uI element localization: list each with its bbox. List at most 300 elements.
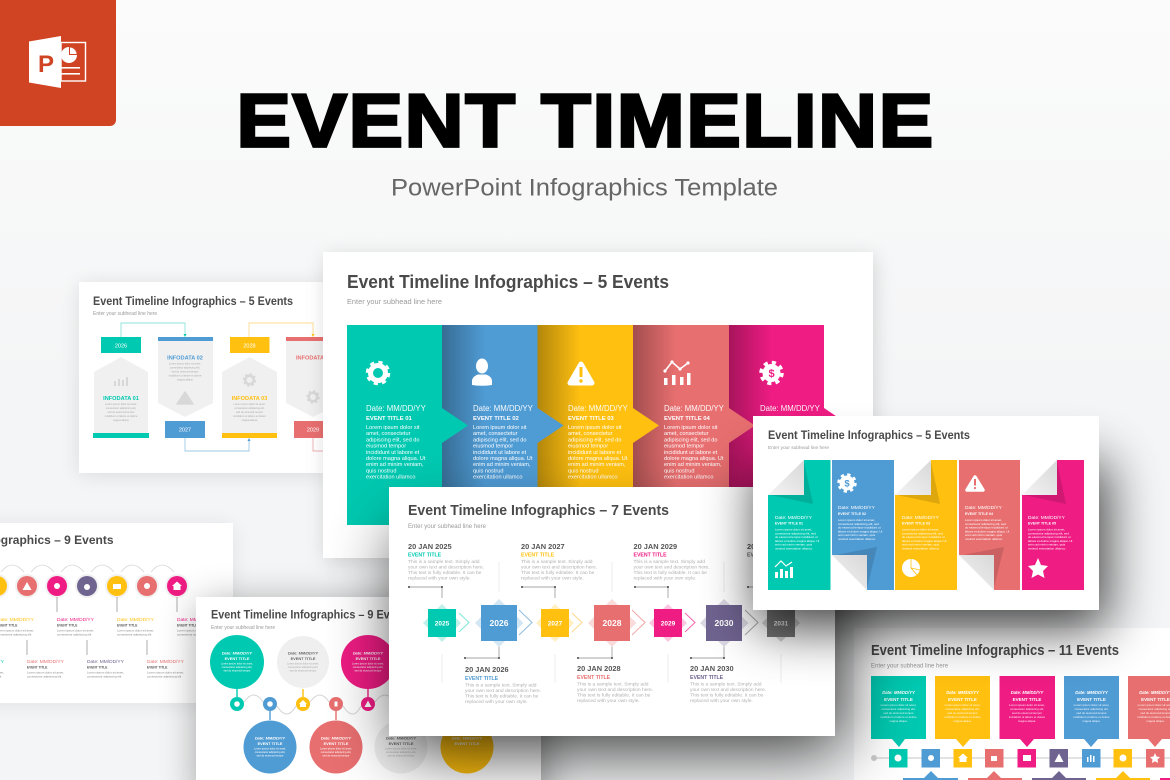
circle labels: EVENT TITLE — [291, 656, 316, 661]
circle body text: Lorem ipsum dolor sit amet, — [221, 662, 253, 666]
heading: Event Timeline Infographics – 5 Events — [347, 271, 669, 292]
event labels top row: EVENT TITLE — [57, 624, 77, 628]
hexagon card 04: 2029 — [307, 428, 319, 434]
circle labels: Date: MM/DD/YY — [452, 736, 483, 740]
year squares: 2031 — [774, 620, 789, 628]
folded column 5: nostrud exercitation ullamco — [1028, 546, 1066, 550]
column text 04: dolore magna aliqua. Ut — [664, 456, 724, 462]
event labels bottom row: consectetur adipiscing elit — [147, 674, 182, 678]
folded column 3: Date: MM/DD/YY — [902, 515, 940, 521]
circle labels: EVENT TITLE — [324, 741, 349, 746]
folded column 4: enim ad minim veniam, quis — [965, 533, 1003, 537]
event labels bottom row: Date: MM/DD/YY — [27, 659, 65, 665]
subhead: Enter your subhead line here — [347, 297, 442, 306]
icon: gear — [368, 362, 388, 384]
event note 2027: 20 JAN 2027 — [521, 542, 565, 551]
folded column 4: do eiusmod tempor incididunt ut — [965, 526, 1008, 530]
hexagon card 02: magna aliqua. — [177, 378, 193, 382]
callout cards top: incididunt ut labore et dolore — [1009, 715, 1046, 719]
column text 01: quis nostrud — [366, 468, 396, 474]
hexagon card 03 — [222, 337, 277, 438]
callout cards top: sed do eiusmod tempor — [883, 711, 914, 715]
folded column 2: nostrud exercitation ullamco — [838, 537, 876, 541]
folded column 1: Lorem ipsum dolor sit amet, — [775, 528, 812, 532]
hexagon card 03: sed do eiusmod tempor — [236, 410, 263, 414]
panel: slide nine events circles: Enter your subhead line here — [211, 625, 275, 631]
event labels top row: EVENT TITLE — [117, 624, 137, 628]
circle body text: sed do eiusmod tempor — [223, 668, 251, 672]
hexagon card 02 — [158, 337, 213, 438]
year squares — [428, 605, 795, 641]
callout cards top: magna aliqua. — [889, 719, 908, 723]
column text 01: adipiscing elit, sed do — [366, 437, 420, 443]
folded column 2: $ — [844, 478, 850, 490]
folded column 5: Lorem ipsum dolor sit amet, — [1028, 528, 1065, 532]
event labels bottom row — [0, 659, 185, 678]
hexagon card 02: Lorem ipsum dolor sit amet, — [169, 362, 201, 366]
event labels top row: Lorem ipsum dolor sit amet, — [57, 628, 94, 632]
callout cards top: Lorem ipsum dolor sit amet, — [881, 703, 917, 707]
folded column 4: Date: MM/DD/YY — [965, 505, 1003, 511]
small nodes — [230, 697, 375, 711]
callout cards top: magna aliqua. — [953, 719, 972, 723]
column text 02: incididunt ut labore et — [473, 450, 527, 456]
icon: person — [472, 358, 492, 386]
circle body text: sed do eiusmod tempor — [322, 754, 350, 758]
callout cards top: EVENT TITLE — [1077, 697, 1106, 702]
event labels top row: EVENT TITLE — [177, 624, 197, 628]
folded column 1: Date: MM/DD/YY — [775, 515, 813, 521]
circle labels: EVENT TITLE — [225, 656, 250, 661]
subhead: Enter your subhead line here — [408, 523, 486, 530]
column text 04: enim ad minim veniam, — [664, 462, 722, 468]
connecting curves — [244, 695, 395, 714]
folded column 1: do eiusmod tempor incididunt ut — [775, 535, 818, 539]
hexagon card 01: magna aliqua. — [113, 418, 129, 422]
folded column 4 — [959, 460, 1020, 590]
column text 02: Date: MM/DD/YY — [473, 404, 534, 413]
folded column 1: EVENT TITLE 01 — [775, 522, 803, 526]
column text 05 — [760, 404, 821, 422]
circle labels: Date: MM/DD/YY — [255, 736, 286, 740]
callout cards top: Lorem ipsum dolor sit amet, — [1009, 703, 1045, 707]
callout cards top — [871, 676, 1170, 747]
event labels top row: Date: MM/DD/YY — [117, 617, 155, 623]
panel: slide eleven events: Event Timeline Infographics – 11 Events — [871, 643, 1119, 659]
subhead: Enter your subhead line here — [768, 445, 829, 451]
year squares: 2026 — [490, 618, 509, 628]
column text 03: amet, consectetur — [568, 431, 613, 437]
panel: slide hexagon timeline: Event Timeline Infographics – 5 Events — [93, 294, 293, 308]
column text 02: adipiscing elit, sed do — [473, 437, 526, 443]
icon: dollar gear — [761, 362, 782, 384]
event note 2030: 20 JAN 2030 — [690, 664, 734, 673]
event note 2025: This text is fully editable. It can be — [408, 570, 482, 576]
year diamonds — [423, 599, 800, 647]
event note 2026 — [465, 665, 541, 705]
folded column 5: Date: MM/DD/YY — [1028, 515, 1066, 521]
circle body text: sed do eiusmod tempor — [387, 754, 415, 758]
faint guide lines — [442, 562, 781, 683]
icon: line chart — [663, 360, 690, 385]
column text 01: dolore magna aliqua. Ut — [366, 456, 426, 462]
event labels bottom row: consectetur adipiscing elit — [87, 674, 122, 678]
folded column 2: labore et dolore magna aliqua. Ut — [838, 529, 883, 533]
circle body text — [221, 662, 417, 758]
column text 03: Date: MM/DD/YY — [568, 404, 629, 413]
callout cards top: magna aliqua. — [1018, 719, 1036, 723]
callout cards top: EVENT TITLE — [884, 697, 913, 702]
square node timeline — [871, 749, 1170, 768]
event note 2028: This is a sample text. Simply add — [577, 682, 649, 688]
column text 03: EVENT TITLE 03 — [568, 416, 615, 422]
circle labels: Date: MM/DD/YY — [222, 650, 253, 656]
circle labels: Date: MM/DD/YY — [321, 736, 352, 740]
callout cards top: magna aliqua. — [1146, 719, 1165, 723]
heading: Event Timeline Infographics – 7 Events — [408, 502, 669, 519]
callout cards top: Date: MM/DD/YY — [946, 690, 980, 695]
callout cards top: sed do eiusmod tempor — [1012, 711, 1042, 715]
callout cards top: incididunt ut labore et dolore — [880, 715, 917, 719]
hexagon card 03: incididunt ut labore et dolore — [233, 414, 266, 418]
hexagon card 01: Lorem ipsum dolor sit amet, — [105, 402, 137, 406]
event note 2030 — [690, 664, 766, 704]
event labels top row: Date: MM/DD/YY — [177, 617, 215, 623]
hexagon card 03: Lorem ipsum dolor sit amet, — [233, 402, 266, 406]
event note 2025: replaced with your own style. — [408, 576, 471, 582]
folded column 3: labore et dolore magna aliqua. Ut — [902, 539, 947, 543]
event labels bottom row: consectetur adipiscing elit — [27, 674, 62, 678]
event labels top row: consectetur adipiscing elit — [57, 632, 92, 636]
year chevrons — [459, 610, 758, 635]
brackets — [408, 586, 781, 659]
folded column 5: labore et dolore magna aliqua. Ut — [1028, 539, 1073, 543]
callout cards top: Lorem ipsum dolor sit amet, — [1074, 703, 1110, 707]
circle body text: sed do eiusmod tempor — [289, 668, 317, 672]
folded column 5: consectetur adipiscing elit, sed — [1028, 531, 1069, 535]
circle labels: EVENT TITLE — [356, 656, 381, 661]
hexagon card 01: sed do eiusmod tempor — [107, 410, 135, 414]
event labels top row: Date: MM/DD/YY — [57, 617, 95, 623]
year squares: 2030 — [715, 618, 734, 628]
column text 01: Date: MM/DD/YY — [366, 404, 427, 413]
circle labels — [222, 650, 483, 746]
column text 01: Lorem ipsum dolor sit — [366, 425, 420, 431]
folded column 3: enim ad minim veniam, quis — [902, 543, 940, 547]
column text 03: exercitation ullamco — [568, 475, 617, 481]
callout cards top: sed do eiusmod tempor — [947, 711, 978, 715]
heading: Event Timeline Infographics – 5 Events — [768, 430, 970, 442]
circle body text: consectetur adipiscing elit, — [321, 750, 351, 754]
callout cards top: Lorem ipsum dolor sit amet, — [945, 703, 981, 707]
folded column 3: do eiusmod tempor incididunt ut — [902, 535, 945, 539]
circle body text: sed do eiusmod tempor — [256, 754, 284, 758]
year squares: 2025 — [435, 620, 450, 628]
column text 03: eiusmod tempor — [568, 444, 608, 450]
event labels top row: Lorem ipsum dolor sit amet, — [177, 628, 214, 632]
callout cards top: consectetur adipiscing elit, — [1075, 707, 1109, 711]
event note 2026: This text is fully editable. It can be — [465, 694, 539, 700]
hexagon card 03: consectetur adipiscing elit, — [234, 406, 265, 410]
callout cards top: EVENT TITLE — [1141, 697, 1170, 702]
PowerPoint badge — [0, 0, 116, 126]
circle body text: Lorem ipsum dolor sit amet, — [320, 746, 352, 750]
folded column 4: labore et dolore magna aliqua. Ut — [965, 529, 1010, 533]
folded column 4: EVENT TITLE 04 — [965, 512, 993, 516]
event note 2028: This text is fully editable. It can be — [577, 692, 651, 698]
event labels bottom row: EVENT TITLE — [147, 666, 167, 670]
hexagon card 02: 2027 — [179, 428, 191, 434]
folded column 1: consectetur adipiscing elit, sed — [775, 531, 816, 535]
column text 03: quis nostrud — [568, 468, 598, 474]
event labels top row: consectetur adipiscing elit — [177, 632, 212, 636]
column text 01 — [366, 404, 427, 481]
timeline circles — [0, 574, 189, 598]
folded column 2: consectetur adipiscing elit, sed — [838, 522, 879, 526]
hexagon card 01: 2026 — [115, 344, 127, 350]
folded column 5: EVENT TITLE 05 — [1028, 522, 1056, 526]
callout cards top: EVENT TITLE — [948, 697, 977, 702]
event note 2029: 20 JAN 2029 — [634, 542, 677, 551]
event note 2030: replaced with your own style. — [690, 698, 753, 704]
event note 2030: This text is fully editable. It can be — [690, 692, 764, 698]
event note 2026: EVENT TITLE — [465, 676, 499, 682]
folded column 3: EVENT TITLE 03 — [902, 522, 930, 526]
column text 02 — [473, 404, 534, 481]
arrow columns — [347, 325, 850, 525]
hexagon card 02: consectetur adipiscing elit, — [170, 366, 200, 370]
column text 02: EVENT TITLE 02 — [473, 416, 520, 422]
circle body text: consectetur adipiscing elit, — [255, 750, 285, 754]
hexagon card 02: incididunt ut labore et dolore — [169, 374, 202, 378]
folded column 3 — [895, 460, 957, 590]
column text 04: adipiscing elit, sed do — [664, 437, 718, 443]
folded column 1: enim ad minim veniam, quis — [775, 543, 813, 547]
folded column 3: consectetur adipiscing elit, sed — [902, 531, 943, 535]
callout cards top: incididunt ut labore et dolore — [1073, 715, 1110, 719]
folded column 1: nostrud exercitation ullamco — [775, 546, 813, 550]
column text 03: adipiscing elit, sed do — [568, 437, 622, 443]
event note 2026: 20 JAN 2026 — [465, 665, 509, 674]
column text 03: enim ad minim veniam, — [568, 462, 626, 468]
folded column 3: Lorem ipsum dolor sit amet, — [902, 528, 939, 532]
callout cards top: Date: MM/DD/YY — [882, 690, 916, 695]
connectors — [121, 323, 325, 451]
panel: slide hexagon timeline — [79, 282, 341, 475]
folded column 4: nostrud exercitation ullamco — [965, 537, 1003, 541]
event note 2031: EVENT TITLE — [747, 552, 781, 558]
event note 2030: EVENT TITLE — [690, 675, 724, 681]
folded column 2: Date: MM/DD/YY — [838, 505, 876, 511]
folded column 4: consectetur adipiscing elit, sed — [965, 522, 1006, 526]
icon: PowerPoint logo: P — [38, 51, 54, 78]
hexagon card 03: 2028 — [243, 344, 256, 350]
callout cards top: EVENT TITLE — [1013, 697, 1041, 702]
circle body text: consectetur adipiscing elit, — [288, 665, 318, 669]
circle body text: Lorem ipsum dolor sit amet, — [287, 662, 319, 666]
hexagon card 01 — [93, 337, 149, 438]
column text 01: eiusmod tempor — [366, 444, 406, 450]
callout cards top: magna aliqua. — [1082, 719, 1101, 723]
event note 2025: EVENT TITLE — [408, 552, 442, 558]
folded column 1 — [768, 460, 830, 590]
column text 04: amet, consectetur — [664, 431, 709, 437]
folded column 2: do eiusmod tempor incididunt ut — [838, 526, 881, 530]
icon: dollar gear: $ — [768, 368, 775, 380]
event labels bottom row: EVENT TITLE — [87, 666, 107, 670]
icon: warning — [570, 364, 592, 383]
hexagon card 02: INFODATA 02 — [167, 356, 203, 362]
hexagon card 02: sed do eiusmod tempor — [171, 370, 199, 374]
event note 2027: EVENT TITLE — [521, 552, 555, 558]
event labels top row: Lorem ipsum dolor sit amet, — [117, 628, 154, 632]
folded column 2 — [832, 460, 894, 590]
column text 01: amet, consectetur — [366, 431, 411, 437]
column text 02: exercitation ullamco — [473, 475, 522, 481]
circle body text: Lorem ipsum dolor sit amet, — [385, 746, 417, 750]
callout cards top: sed do eiusmod tempor — [1140, 711, 1170, 715]
column text 04: Date: MM/DD/YY — [664, 404, 725, 413]
callout cards bottom — [903, 771, 1170, 780]
event note 2030: your own text and description here. — [690, 687, 766, 693]
circle labels: Date: MM/DD/YY — [288, 650, 319, 656]
event note 2029: your own text and description here. — [634, 564, 710, 570]
panel: slide nine events circles — [196, 597, 545, 780]
column text 04: exercitation ullamco — [664, 475, 713, 481]
column text 01: exercitation ullamco — [366, 475, 415, 481]
circle labels: EVENT TITLE — [258, 741, 283, 746]
panel: slide eleven events: Enter your subhead line here — [871, 664, 949, 670]
circle body text: consectetur adipiscing elit, — [222, 665, 252, 669]
circle body text: consectetur adipiscing elit, — [386, 750, 416, 754]
event note 2028: 20 JAN 2028 — [577, 664, 621, 673]
event labels top row — [0, 617, 215, 636]
event note 2025: 20 JAN 2025 — [408, 542, 452, 551]
column text 02: eiusmod tempor — [473, 444, 513, 450]
subtitle: PowerPoint Infographics Template — [391, 174, 778, 202]
event note 2030: This is a sample text. Simply add — [690, 682, 762, 688]
circle body text: Lorem ipsum dolor sit amet, — [352, 662, 384, 666]
folded column 3: nostrud exercitation ullamco — [902, 546, 940, 550]
hexagon card 03: INFODATA 03 — [232, 396, 267, 402]
callout cards top: consectetur adipiscing elit, — [946, 707, 980, 711]
callout cards top: incididunt ut labore et dolore — [944, 715, 981, 719]
column text 03: incididunt ut labore et — [568, 450, 622, 456]
event labels bottom row: Lorem ipsum dolor sit amet, — [27, 670, 64, 674]
folded column 5: do eiusmod tempor incididunt ut — [1028, 535, 1071, 539]
panel: slide nine events line — [0, 523, 233, 705]
folded column 4: Lorem ipsum dolor sit amet, — [965, 518, 1002, 522]
column text 03: dolore magna aliqua. Ut — [568, 456, 628, 462]
column text 05: EVENT TITLE 05 — [760, 416, 807, 422]
circle body text: sed do eiusmod tempor — [354, 668, 382, 672]
year squares: 2028 — [603, 618, 622, 628]
column text 05: Date: MM/DD/YY — [760, 404, 821, 413]
column text 04: Lorem ipsum dolor sit — [664, 425, 718, 431]
column text 02: enim ad minim veniam, — [473, 462, 531, 468]
callout cards top: Date: MM/DD/YY — [1075, 690, 1109, 695]
event stems — [27, 597, 177, 655]
year squares: 2029 — [661, 620, 676, 628]
panel: slide seven events — [389, 487, 843, 750]
event note 2029: EVENT TITLE — [634, 552, 667, 558]
column text 02: Lorem ipsum dolor sit — [473, 425, 527, 431]
circle labels: Date: MM/DD/YY — [386, 736, 417, 740]
folded column 1: labore et dolore magna aliqua. Ut — [775, 539, 820, 543]
column text 02: dolore magna aliqua. Ut — [473, 456, 533, 462]
event labels bottom row: EVENT TITLE — [27, 666, 47, 670]
folded column 5: enim ad minim veniam, quis — [1028, 543, 1066, 547]
folded column 2: EVENT TITLE 02 — [838, 512, 866, 516]
panel: slide nine events circles: Event Timeline Infographics – 9 Events — [211, 608, 412, 622]
event labels bottom row: Date: MM/DD/YY — [87, 659, 125, 665]
event note 2028: your own text and description here. — [577, 687, 653, 693]
large event circles — [210, 635, 494, 774]
column text 01: enim ad minim veniam, — [366, 462, 424, 468]
column text 03: Lorem ipsum dolor sit — [568, 425, 622, 431]
column text 04: incididunt ut labore et — [664, 450, 718, 456]
folded column 5 — [1022, 460, 1084, 590]
column text 02: quis nostrud — [473, 468, 503, 474]
column text 02: amet, consectetur — [473, 431, 518, 437]
event note 2029 — [634, 542, 710, 582]
circle body text: consectetur adipiscing elit, — [353, 665, 383, 669]
event note 2031 — [747, 542, 791, 558]
panel: slide hexagon timeline: Enter your subhead line here — [93, 311, 157, 317]
event note 2026: This is a sample text. Simply add — [465, 682, 537, 688]
stems — [237, 689, 368, 720]
circle labels: Date: MM/DD/YY — [353, 650, 384, 656]
event note 2026: your own text and description here. — [465, 688, 541, 694]
column text 04: EVENT TITLE 04 — [664, 416, 711, 422]
hexagon card 01: consectetur adipiscing elit, — [106, 406, 136, 410]
folded column 2: Lorem ipsum dolor sit amet, — [838, 518, 875, 522]
folded column 2: enim ad minim veniam, quis — [838, 533, 876, 537]
arcs — [1, 565, 174, 572]
hexagon card 04 — [286, 337, 341, 438]
event labels bottom row: Date: MM/DD/YY — [147, 659, 185, 665]
callout cards top: sed do eiusmod tempor — [1076, 711, 1107, 715]
event note 2027: your own text and description here. — [521, 564, 597, 570]
event note 2025: your own text and description here. — [408, 564, 484, 570]
title: EVENT TIMELINE — [237, 78, 933, 163]
event note 2027: This is a sample text. Simply add — [521, 559, 593, 565]
event note 2029: This is a sample text. Simply add — [634, 559, 705, 565]
event note 2029: This text is fully editable. It can be — [634, 570, 707, 576]
column text 03 — [568, 404, 629, 481]
event note 2031: 20 JAN 2031 — [747, 542, 791, 551]
event note 2026: replaced with your own style. — [465, 699, 528, 705]
event note 2025 — [408, 542, 484, 582]
column text 01: incididunt ut labore et — [366, 450, 420, 456]
callout cards top: consectetur adipiscing elit, — [1010, 707, 1044, 711]
column text 04 — [664, 404, 725, 481]
event note 2027: This text is fully editable. It can be — [521, 570, 595, 576]
hexagon card 03: magna aliqua. — [241, 418, 258, 422]
column text 04: quis nostrud — [664, 468, 694, 474]
event labels top row: consectetur adipiscing elit — [117, 632, 152, 636]
panel: slide folded five events — [753, 416, 1107, 628]
column text 01: EVENT TITLE 01 — [366, 416, 413, 422]
event note 2029: replaced with your own style. — [634, 576, 696, 582]
callout cards top: Date: MM/DD/YY — [1011, 690, 1044, 695]
panel: slide main five events — [323, 252, 875, 562]
event note 2025: This is a sample text. Simply add — [408, 559, 480, 565]
circle labels: EVENT TITLE — [455, 741, 480, 746]
circle labels: EVENT TITLE — [389, 741, 414, 746]
callout cards top: consectetur adipiscing elit, — [882, 707, 916, 711]
column text 04: eiusmod tempor — [664, 444, 704, 450]
